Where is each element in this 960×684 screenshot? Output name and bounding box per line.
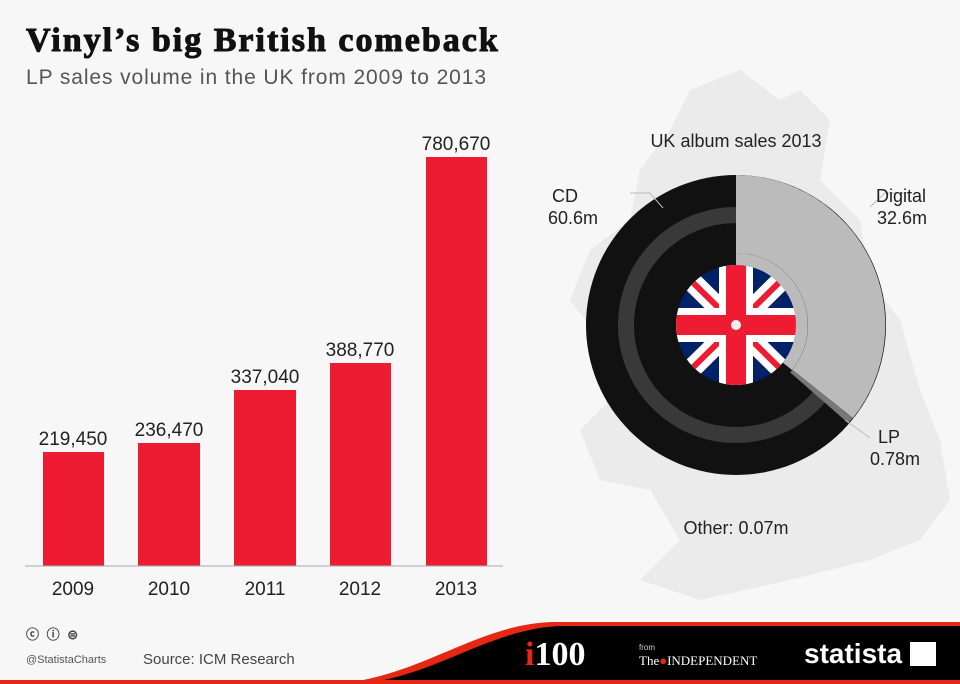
bar chart: 2013 <box>435 579 477 600</box>
pie chart: vinyl record: 60.6m <box>548 208 598 228</box>
pie chart: vinyl record: 32.6m <box>877 208 927 228</box>
bar chart: 2010 <box>148 579 190 600</box>
logo: the independent: from <box>639 643 655 652</box>
bar chart: 2012 <box>339 579 381 600</box>
pie chart: vinyl record: LP <box>878 427 900 447</box>
credits: @StatistaCharts <box>26 654 106 666</box>
bar chart <box>25 134 503 600</box>
title: Vinyl’s big British comeback <box>26 22 500 59</box>
pie chart: vinyl record <box>548 131 927 538</box>
bar chart: 219,450 <box>39 429 107 450</box>
logo: i100: i100 <box>525 636 585 673</box>
source: Source: ICM Research <box>143 651 295 668</box>
pie chart: vinyl record: Other: 0.07m <box>683 518 789 538</box>
subtitle: LP sales volume in the UK from 2009 to 2013 <box>26 66 487 89</box>
bar chart: 388,770 <box>326 340 394 361</box>
pie chart: vinyl record: CD <box>552 186 578 206</box>
bar chart: 2011 <box>245 579 285 600</box>
bar chart: 236,470 <box>135 420 203 441</box>
logo: statista: statista <box>804 638 902 669</box>
pie chart: vinyl record: 0.78m <box>870 449 920 469</box>
bar chart: 337,040 <box>231 367 299 388</box>
bar chart: 780,670 <box>422 134 490 155</box>
text: The●INDEPENDENT <box>639 653 757 668</box>
pie chart: vinyl record: UK album sales 2013 <box>650 131 822 151</box>
background map of UK <box>570 70 950 600</box>
pie chart: vinyl record: Digital <box>876 186 926 206</box>
bar chart: 2009 <box>52 579 94 600</box>
footer band <box>0 622 960 684</box>
icons: creative commons: ⓒ ⓘ ⊜ <box>26 627 80 642</box>
